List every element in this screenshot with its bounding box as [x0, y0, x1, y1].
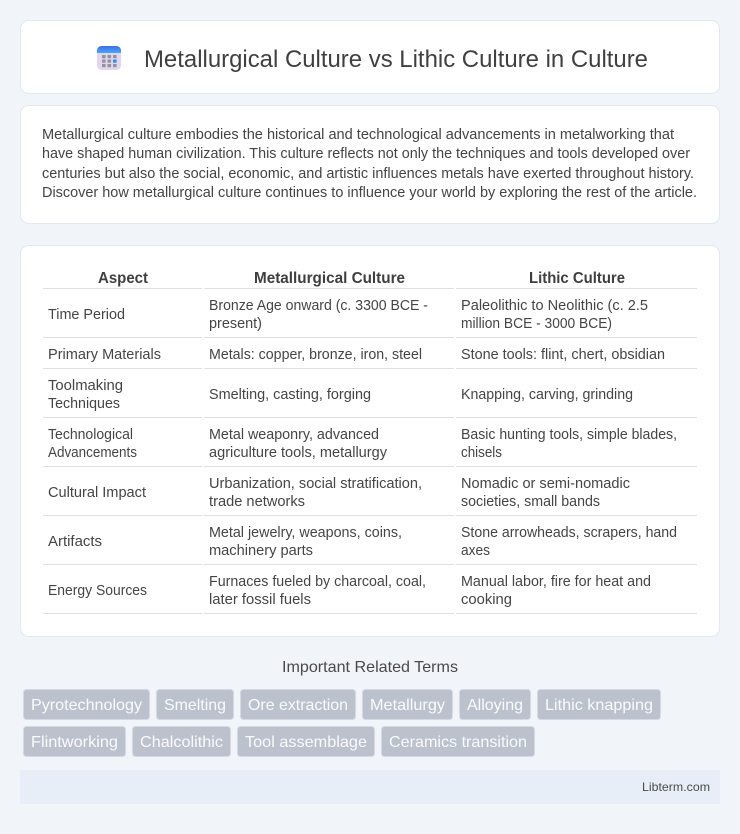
- row: cultural impact: Cultural Impact: [48, 485, 146, 501]
- row: primary materials: Metals: copper, bronze, iron, steel: [209, 347, 422, 363]
- row: primary materials: Stone tools: flint, chert, obsidian: [461, 347, 665, 363]
- panel: title header: [20, 20, 720, 94]
- text block: introduction paragraph: Discover how metallurgical culture continues to influence your world by exploring the rest of the article.: [42, 185, 697, 201]
- related term tags: Ceramics transition: [389, 734, 527, 751]
- row: technological advancements: chisels: [461, 445, 502, 461]
- row: toolmaking techniques: Smelting, casting, forging: [209, 387, 371, 403]
- panel: comparison table: [20, 246, 720, 636]
- related term tags: Metallurgy: [370, 697, 445, 714]
- row: toolmaking techniques: Toolmaking: [48, 378, 123, 394]
- row: technological advancements: Basic hunting tools, simple blades,: [461, 427, 677, 443]
- footer credit: Libterm.com: [642, 780, 710, 794]
- text block: introduction paragraph: Metallurgical culture embodies the historical and technological advancements in metalworking that: [42, 127, 674, 143]
- related term tags: [24, 690, 660, 756]
- related term tags: Lithic knapping: [545, 697, 653, 714]
- text block: introduction paragraph: have shaped human civilization. This culture reflects not only the techniques and tools developed over: [42, 146, 690, 162]
- related term tags: Tool assemblage: [245, 734, 367, 751]
- table header: [98, 270, 625, 287]
- row: toolmaking techniques: Knapping, carving, grinding: [461, 387, 633, 403]
- row: cultural impact: Urbanization, social stratification,: [209, 476, 422, 492]
- row: cultural impact: [48, 476, 630, 510]
- row: toolmaking techniques: Techniques: [48, 396, 120, 412]
- related term tags: Pyrotechnology: [31, 697, 142, 714]
- text block: introduction paragraph: [42, 127, 697, 201]
- icon: calendar: [97, 46, 121, 70]
- related term tags: Flintworking: [31, 734, 118, 751]
- row: technological advancements: [48, 427, 677, 461]
- row: technological advancements: Advancements: [48, 445, 137, 461]
- row: toolmaking techniques: [48, 378, 633, 412]
- footer: [20, 770, 720, 804]
- row: cultural impact: Nomadic or semi-nomadic: [461, 476, 630, 492]
- row: energy sources: [48, 574, 651, 608]
- row: artifacts: machinery parts: [209, 543, 313, 559]
- row: time period: [48, 298, 648, 332]
- row: cultural impact: trade networks: [209, 494, 305, 510]
- row: energy sources: Furnaces fueled by charcoal, coal,: [209, 574, 426, 590]
- row: time period: Time Period: [48, 307, 125, 323]
- row: primary materials: Primary Materials: [48, 347, 161, 363]
- row: cultural impact: societies, small bands: [461, 494, 600, 510]
- row: artifacts: Metal jewelry, weapons, coins,: [209, 525, 402, 541]
- row: artifacts: axes: [461, 543, 490, 559]
- row: technological advancements: Technological: [48, 427, 133, 443]
- row: technological advancements: agriculture tools, metallurgy: [209, 445, 388, 461]
- row: artifacts: Artifacts: [48, 534, 102, 550]
- row: time period: present): [209, 316, 262, 332]
- row: primary materials: [48, 347, 665, 363]
- related term tags: Alloying: [467, 697, 523, 714]
- table header: Aspect: [98, 270, 149, 287]
- row: time period: million BCE - 3000 BCE): [461, 316, 612, 332]
- row: energy sources: Manual labor, fire for heat and: [461, 574, 651, 590]
- related term tags: Chalcolithic: [140, 734, 223, 751]
- row: time period: Bronze Age onward (c. 3300 BCE -: [209, 298, 428, 314]
- related term tags: Ore extraction: [248, 697, 348, 714]
- row: energy sources: Energy Sources: [48, 583, 147, 599]
- table header: Metallurgical Culture: [254, 270, 405, 287]
- title: Metallurgical Culture vs Lithic Culture in Culture: [144, 46, 648, 73]
- row: time period: Paleolithic to Neolithic (c. 2.5: [461, 298, 648, 314]
- related term tags: Smelting: [164, 697, 226, 714]
- panel: introduction: [20, 106, 720, 224]
- row: technological advancements: Metal weaponry, advanced: [209, 427, 379, 443]
- heading: important related terms: Important Related Terms: [282, 659, 458, 676]
- row: energy sources: cooking: [461, 592, 512, 608]
- row: energy sources: later fossil fuels: [209, 592, 311, 608]
- row: artifacts: Stone arrowheads, scrapers, hand: [461, 525, 677, 541]
- text block: introduction paragraph: centuries but also the social, economic, and artistic influences metals have exerted throughout history.: [42, 166, 694, 182]
- table header: Lithic Culture: [529, 270, 625, 287]
- row: artifacts: [48, 525, 677, 559]
